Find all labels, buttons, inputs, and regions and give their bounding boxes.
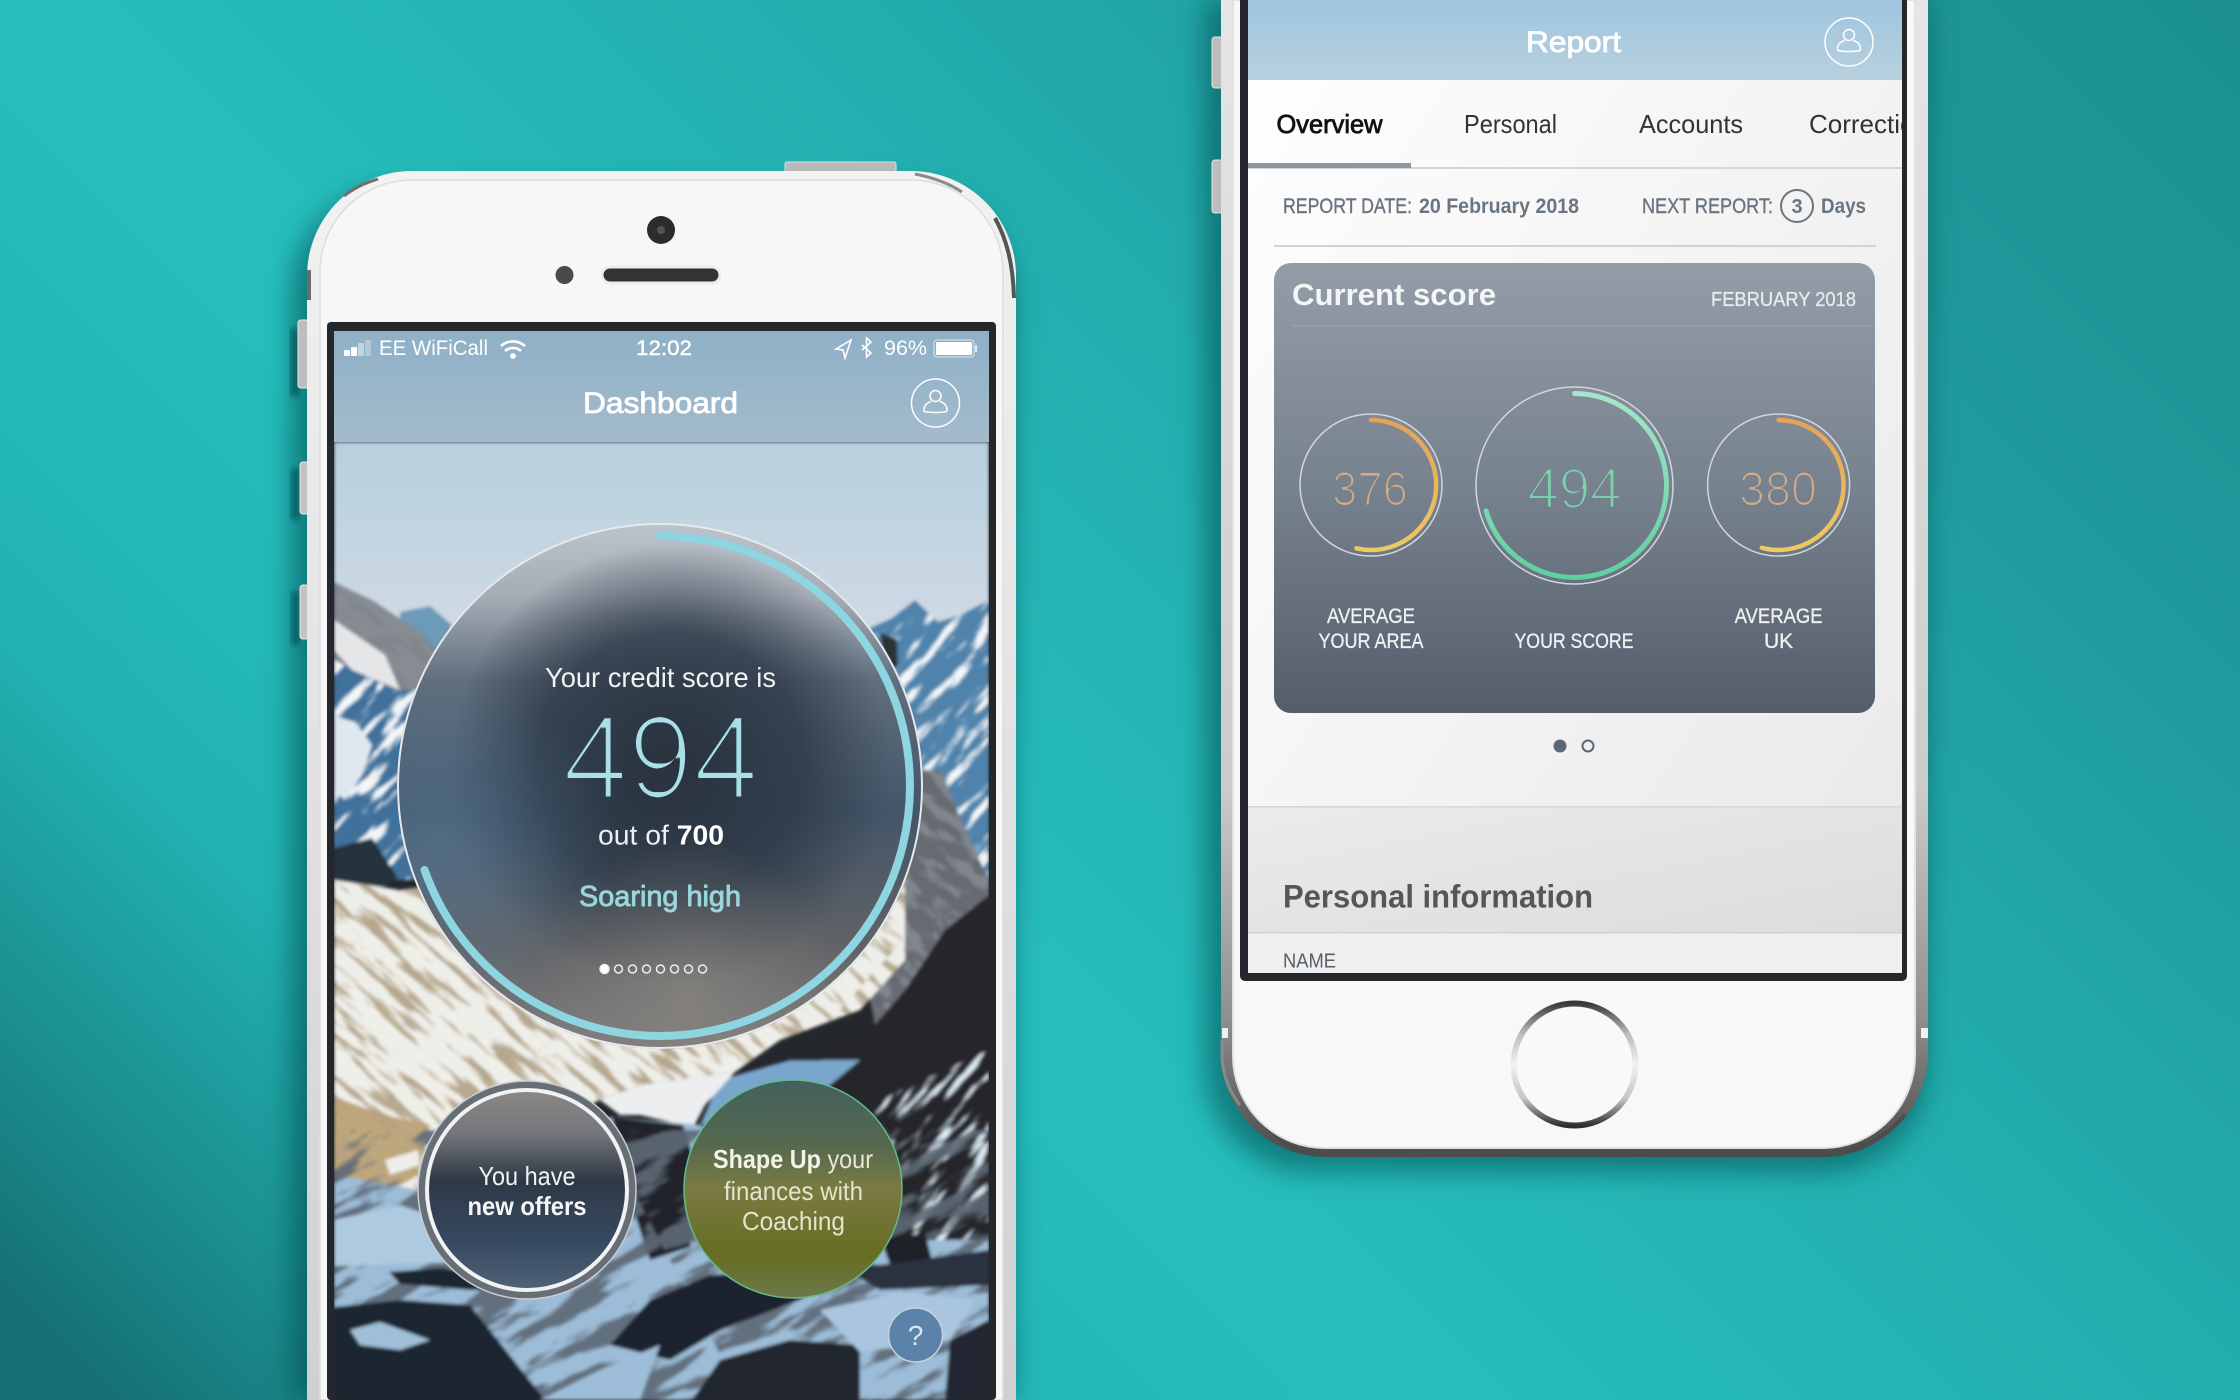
report dates: Days bbox=[1821, 195, 1866, 218]
heading: Report: Report bbox=[1526, 26, 1622, 59]
nav bar bbox=[334, 331, 989, 442]
tabs: Overview bbox=[1276, 109, 1383, 139]
icon: side buttons bbox=[298, 162, 896, 639]
text: out of 700: out of 700 bbox=[598, 820, 724, 850]
panel: personal information bbox=[1248, 806, 1902, 973]
panel: report screen bbox=[1248, 0, 1942, 973]
gauge: your score: 494 bbox=[1528, 457, 1622, 521]
icon: signal bbox=[344, 340, 371, 356]
text: label: Your credit score is bbox=[545, 662, 776, 693]
tabs: Accounts bbox=[1639, 109, 1743, 139]
icon: front camera bbox=[647, 216, 675, 244]
icon: bluetooth bbox=[862, 338, 871, 357]
panel: personal information: Personal information bbox=[1283, 878, 1593, 914]
gauge: average your area: YOUR AREA bbox=[1318, 630, 1424, 653]
gauge: average UK: AVERAGE bbox=[1735, 605, 1823, 628]
snow basin bbox=[600, 1060, 860, 1130]
report dates: 3 bbox=[1791, 196, 1803, 218]
icon: proximity sensor bbox=[556, 266, 574, 284]
score arc bbox=[424, 536, 910, 1036]
icon: location arrow bbox=[836, 340, 851, 358]
icon: speaker bbox=[602, 267, 720, 283]
gauge: average your area bbox=[1300, 414, 1442, 653]
button: coaching bbox=[684, 1080, 902, 1298]
dark upper-right rock bbox=[700, 895, 989, 1240]
status bar: 12:02 bbox=[636, 337, 692, 360]
button: help bbox=[888, 1308, 942, 1362]
gauge: average your area: 376 bbox=[1332, 462, 1408, 515]
heading: Dashboard: Dashboard bbox=[583, 387, 738, 420]
gauge: your score bbox=[1476, 387, 1673, 653]
panel: current score card: Current score bbox=[1292, 277, 1496, 312]
button: new offers: new offers bbox=[468, 1191, 586, 1221]
panel: dashboard screen bbox=[334, 331, 989, 1400]
gauge: average your area: AVERAGE bbox=[1327, 605, 1415, 628]
button: coaching: Coaching bbox=[742, 1206, 845, 1236]
status bar: 96% bbox=[884, 337, 927, 360]
icon: profile bbox=[1825, 18, 1873, 66]
icon: side buttons bbox=[1212, 37, 1223, 213]
right grey rock bbox=[850, 770, 989, 1050]
button: new offers bbox=[418, 1081, 636, 1299]
snow and brown slope bbox=[334, 877, 908, 1192]
text: status: Soaring high bbox=[579, 881, 741, 913]
panel: credit score dial bbox=[397, 523, 923, 1049]
report dates: NEXT REPORT: bbox=[1642, 195, 1773, 218]
report dates: REPORT DATE: bbox=[1283, 195, 1412, 218]
screen frame bbox=[327, 322, 996, 1400]
text: score 494: 494 bbox=[562, 692, 758, 824]
tabs bbox=[1248, 109, 1942, 169]
icon: profile bbox=[912, 379, 960, 427]
gauge: average UK: 380 bbox=[1739, 462, 1817, 515]
panel: current score card bbox=[1274, 263, 1875, 713]
report dates: 20 February 2018 bbox=[1419, 195, 1579, 218]
lower snowfield bbox=[334, 1117, 989, 1400]
icon: wifi bbox=[501, 341, 525, 358]
button: coaching: finances with bbox=[724, 1176, 863, 1206]
gauge: average UK bbox=[1708, 414, 1850, 653]
button: help: ? bbox=[908, 1320, 923, 1351]
left blue slope bbox=[334, 581, 436, 882]
phone: report bbox=[1205, 0, 1942, 1172]
report dates bbox=[1283, 190, 1866, 222]
pagination dots bbox=[1554, 740, 1594, 752]
nav bar bbox=[1248, 0, 1902, 80]
gauge: average UK: UK bbox=[1764, 630, 1793, 653]
icon: battery bbox=[934, 340, 977, 357]
pagination dots bbox=[600, 964, 706, 974]
icon: home button bbox=[1514, 1004, 1636, 1126]
left dark notch bbox=[334, 836, 399, 889]
mountain photo bbox=[334, 442, 989, 1400]
tabs: Corrections bbox=[1809, 109, 1942, 139]
gauge: your score: YOUR SCORE bbox=[1514, 630, 1634, 653]
status bar bbox=[344, 337, 977, 360]
button: coaching: Shape Up your bbox=[713, 1144, 873, 1174]
screen frame bbox=[1240, 0, 1907, 981]
panel: current score card: FEBRUARY 2018 bbox=[1711, 289, 1856, 311]
panel: personal information: NAME bbox=[1283, 950, 1336, 972]
button: new offers: You have bbox=[478, 1161, 576, 1191]
far blue peaks bbox=[400, 600, 989, 900]
status bar: EE WiFiCall bbox=[379, 337, 488, 360]
phone: dashboard bbox=[290, 162, 1016, 1400]
tabs: Personal bbox=[1464, 109, 1557, 139]
